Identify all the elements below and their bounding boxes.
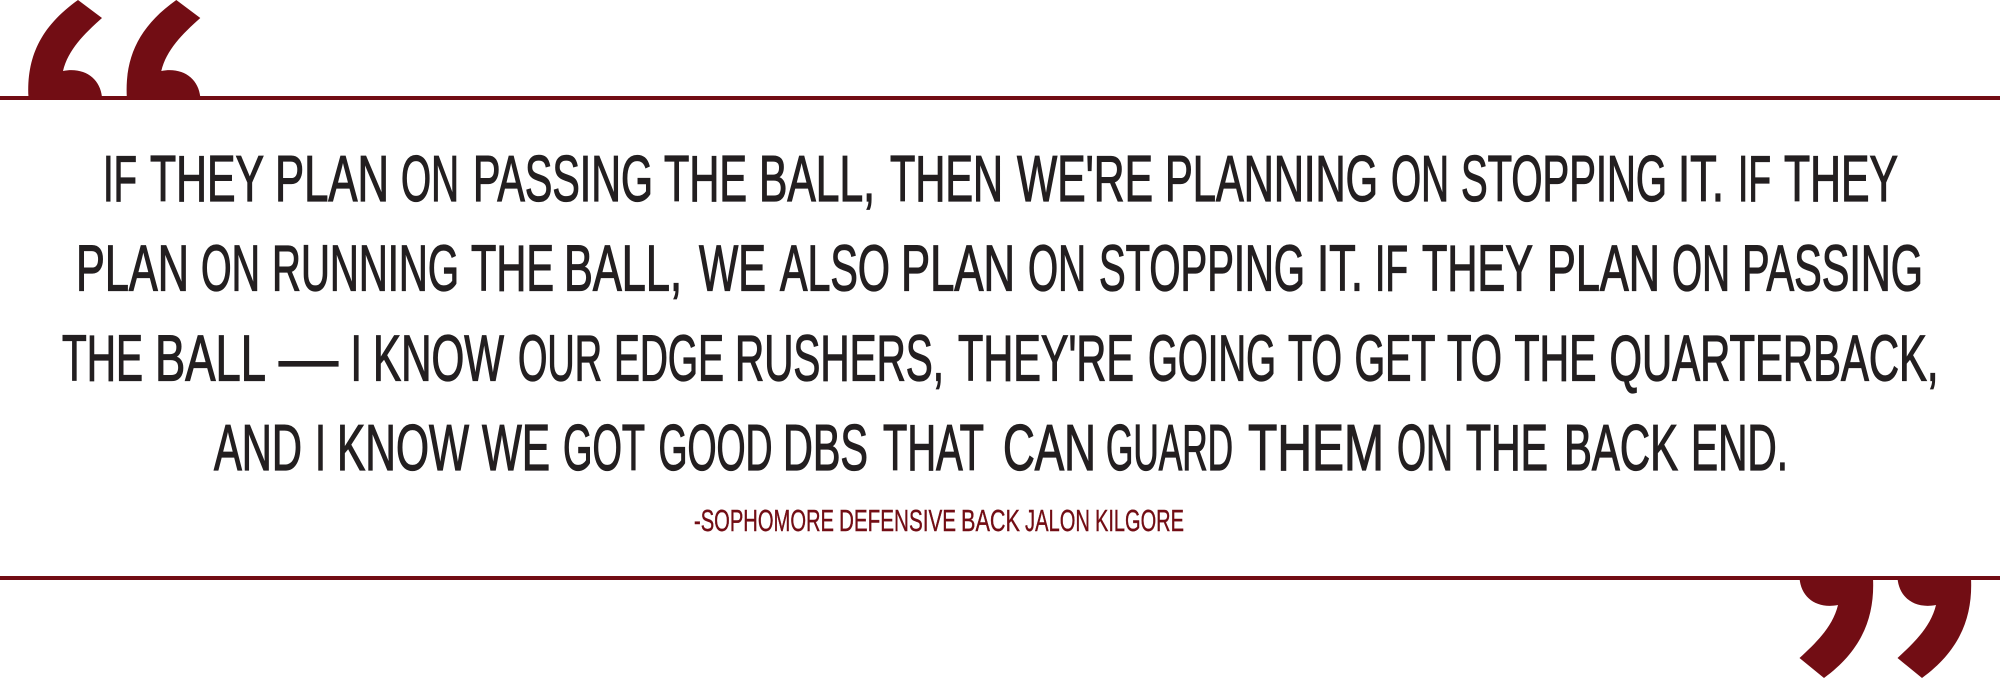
top rule xyxy=(0,96,2000,100)
quote line 3: THE xyxy=(1514,322,1596,394)
quote line 4: THE xyxy=(1466,412,1548,484)
quote line 2: WE xyxy=(699,232,766,304)
quote line 3: KNOW xyxy=(373,322,504,394)
quote line 4: GOT xyxy=(563,412,645,484)
quote line 3: — xyxy=(279,322,338,394)
quote line 1: THE xyxy=(664,143,747,215)
quote line 3: TO xyxy=(1447,322,1502,394)
quote text xyxy=(62,143,1938,484)
quote line 2: THEY xyxy=(1422,232,1533,304)
attribution: JALON xyxy=(1025,503,1090,538)
quote line 4: DBS xyxy=(783,412,868,484)
attribution: KILGORE xyxy=(1095,503,1184,538)
quote line 4: THAT xyxy=(883,412,984,484)
quote line 3: THE xyxy=(62,322,143,394)
quote line 2: ON xyxy=(201,232,260,304)
quote line 3: TO xyxy=(1288,322,1342,394)
quote line 4: GOOD xyxy=(658,412,772,484)
attribution: -SOPHOMORE xyxy=(694,503,834,538)
quote line 1: PASSING xyxy=(473,143,653,215)
quote line 3: I xyxy=(350,322,362,394)
quote line 3: GOING xyxy=(1148,322,1276,394)
quote line 4: ON xyxy=(1397,412,1453,484)
attribution: BACK xyxy=(961,503,1020,538)
quote line 3: RUSHERS, xyxy=(735,322,944,394)
quote line 4: AND xyxy=(214,412,302,484)
quote line 3: OUR xyxy=(518,322,602,394)
quote line 2: PLAN xyxy=(1547,232,1660,304)
quote line 2 xyxy=(76,232,1923,304)
quote line 2: STOPPING xyxy=(1099,232,1305,304)
quote line 1: ON xyxy=(401,143,459,215)
quote line 2: RUNNING xyxy=(272,232,459,304)
quote line 4: END. xyxy=(1691,412,1788,484)
quote line 2: ON xyxy=(1672,232,1730,304)
bottom rule xyxy=(0,576,2000,580)
quote line 3 xyxy=(62,322,1938,394)
quote line 1: WE'RE xyxy=(1017,143,1153,215)
quote line 1: IF xyxy=(1738,143,1771,215)
quote line 4: THEM xyxy=(1248,412,1384,484)
quote line 2: PLAN xyxy=(76,232,189,304)
quote line 3: BALL xyxy=(155,322,266,394)
quote line 4: I xyxy=(315,412,326,484)
quote line 1: THEY xyxy=(150,143,264,215)
quote line 1: BALL, xyxy=(759,143,875,215)
attribution xyxy=(694,503,1184,538)
quote line 1: STOPPING xyxy=(1461,143,1667,215)
quote line 1: IT. xyxy=(1678,143,1724,215)
attribution: DEFENSIVE xyxy=(839,503,956,538)
quote line 1 xyxy=(103,143,1898,215)
quote line 1: THEY xyxy=(1784,143,1898,215)
quote line 4: WE xyxy=(482,412,550,484)
quote line 1: PLAN xyxy=(275,143,389,215)
quote line 2: PLAN xyxy=(901,232,1015,304)
quote line 3: THEY'RE xyxy=(958,322,1134,394)
icon: closing quotation mark xyxy=(1800,578,1971,678)
quote line 4 xyxy=(214,412,1788,484)
quote line 2: ON xyxy=(1028,232,1086,304)
icon: opening quotation mark xyxy=(28,0,200,97)
quote line 2: IF xyxy=(1375,232,1408,304)
quote line 4: BACK xyxy=(1564,412,1678,484)
quote line 2: BALL, xyxy=(564,232,682,304)
quote line 3: EDGE xyxy=(614,322,724,394)
quote line 4: CAN xyxy=(1003,412,1096,484)
quote line 2: IT. xyxy=(1317,232,1363,304)
quote line 2: ALSO xyxy=(780,232,890,304)
quote line 1: PLANNING xyxy=(1165,143,1378,215)
quote line 1: IF xyxy=(103,143,137,215)
quote line 1: ON xyxy=(1391,143,1449,215)
quote line 4: GUARD xyxy=(1106,412,1233,484)
quote line 4: KNOW xyxy=(337,412,469,484)
quote line 3: GET xyxy=(1354,322,1436,394)
quote line 2: THE xyxy=(471,232,554,304)
quote line 1: THEN xyxy=(890,143,1003,215)
